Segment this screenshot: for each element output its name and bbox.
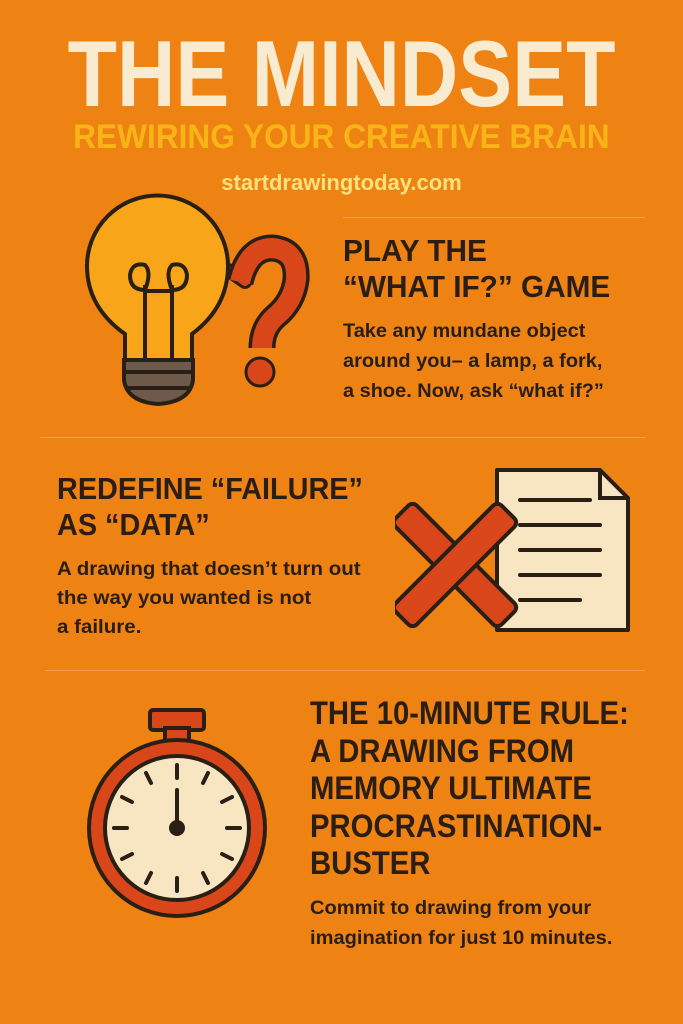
section 3 text: Commit to drawing from your: [310, 897, 591, 919]
section 1 text: [343, 321, 604, 402]
section 2 heading: REDEFINE “FAILURE”: [57, 471, 363, 506]
section 3 heading: MEMORY ULTIMATE: [310, 770, 592, 806]
section 1 text: around you– a lamp, a fork,: [343, 351, 602, 372]
section 2 heading: AS “DATA”: [57, 507, 210, 542]
section 1 text: Take any mundane object: [343, 321, 585, 342]
icon: stopwatch: [87, 708, 267, 918]
section 2 text: [57, 559, 361, 638]
section 3 heading: [310, 695, 629, 881]
section 2 heading: [57, 471, 363, 542]
section 3 heading: THE 10-MINUTE RULE:: [310, 695, 629, 731]
subtitle: REWIRING YOUR CREATIVE BRAIN: [73, 118, 610, 156]
section 1 text: a shoe. Now, ask “what if?”: [343, 381, 604, 402]
section 1 heading: “WHAT IF?” GAME: [343, 269, 610, 304]
icon: lightbulb with question mark: [85, 194, 310, 406]
section 2 text: a failure.: [57, 617, 141, 638]
section 2 text: the way you wanted is not: [57, 588, 311, 609]
icon: X and document: [395, 468, 630, 632]
title: THE MINDSET: [68, 21, 615, 126]
section 3 text: [310, 897, 612, 949]
section 3 heading: PROCRASTINATION-: [310, 808, 602, 844]
section 3 heading: A DRAWING FROM: [310, 732, 574, 768]
section 3 heading: BUSTER: [310, 845, 430, 881]
section 1 heading: [343, 233, 610, 304]
website url: startdrawingtoday.com: [221, 170, 462, 195]
section 2 text: A drawing that doesn’t turn out: [57, 559, 361, 580]
section 1 heading: PLAY THE: [343, 233, 487, 268]
section 3 text: imagination for just 10 minutes.: [310, 927, 612, 949]
